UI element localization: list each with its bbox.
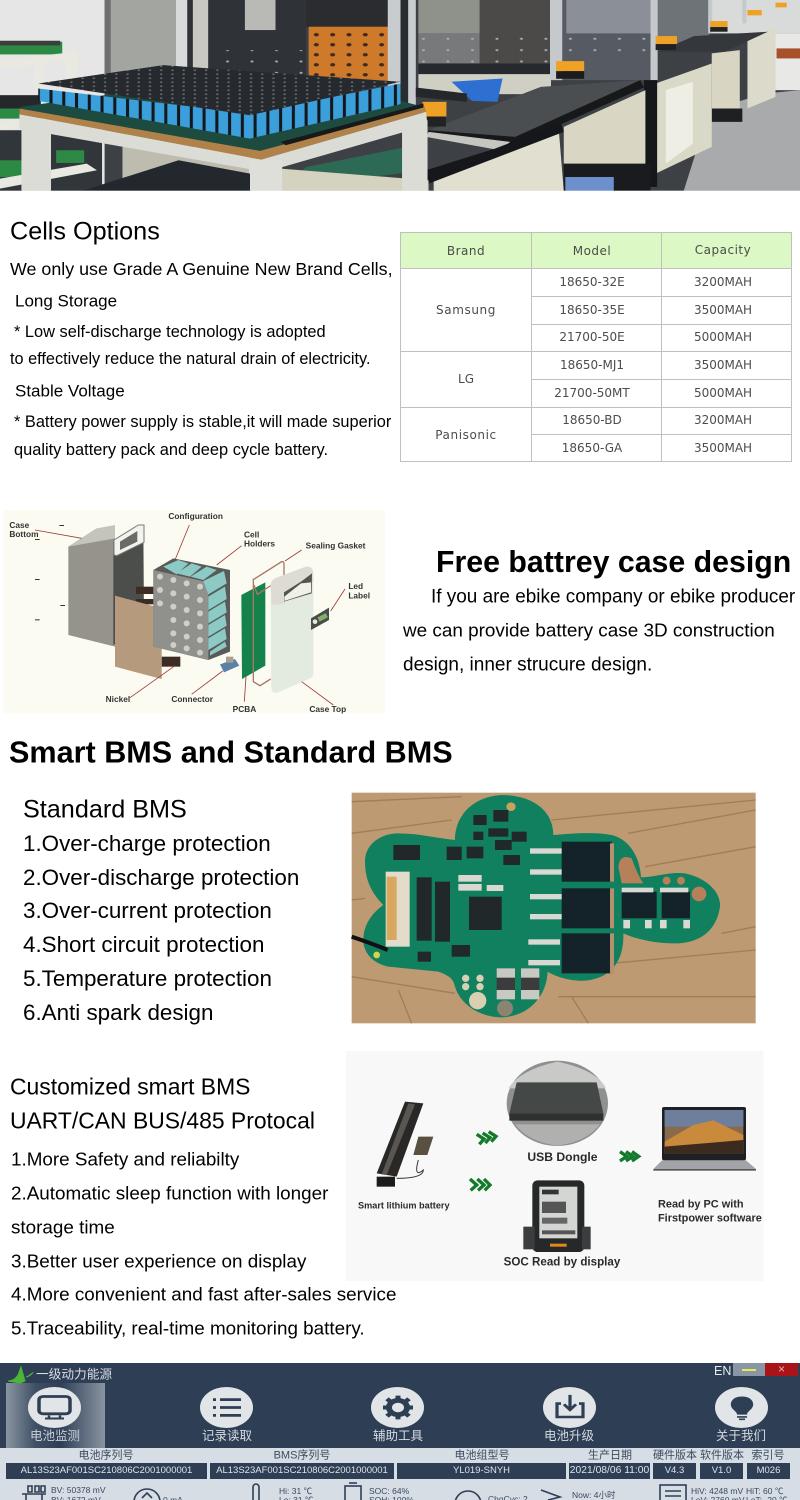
list: smart BMS benefits: storage time	[11, 1217, 115, 1238]
nav icon: about us	[715, 1387, 768, 1443]
diagram labels: Led	[348, 581, 363, 591]
battery info row: 电池序列号	[78, 1450, 134, 1462]
list: standard BMS protections: 5.Temperature protection	[23, 966, 272, 991]
window controls	[714, 1362, 798, 1378]
text block: cells description: to effectively reduce the natural drain of electricity.	[10, 350, 370, 368]
nav icon: record reading	[200, 1387, 253, 1443]
flow labels	[358, 1150, 762, 1269]
battery info row: M026	[757, 1465, 780, 1476]
flow labels: SOC Read by display	[504, 1256, 621, 1269]
text block: case design description: If you are ebike company or ebike producer	[431, 587, 795, 608]
sealing gasket	[253, 562, 284, 686]
workbench with cells	[20, 88, 423, 157]
nav icon: tools: 辅助工具	[373, 1429, 423, 1443]
nickel sheet	[115, 596, 162, 679]
battery info row: 软件版本	[700, 1450, 744, 1462]
diagram: exploded battery case	[4, 510, 385, 714]
list: smart BMS benefits	[11, 1149, 396, 1339]
list: smart BMS benefits: 3.Better user experience on display	[11, 1251, 306, 1272]
cell holders	[153, 558, 230, 660]
window controls: EN	[714, 1364, 731, 1378]
diagram labels: Cell	[244, 529, 259, 539]
list: standard BMS protections: 6.Anti spark design	[23, 1000, 213, 1025]
display	[523, 1180, 591, 1252]
battery info row: YL019-SNYH	[453, 1465, 510, 1476]
table: cell brands, models and capacity: 18650-GA	[562, 441, 622, 455]
heading: smart and standard BMS: Smart BMS and Standard BMS	[9, 736, 453, 770]
app logo and name: 一级动力能源	[36, 1368, 112, 1382]
list: smart BMS benefits: 2.Automatic sleep function with longer	[11, 1183, 328, 1204]
battery status row, clipped by the image edge: BV: 50378 mV	[51, 1485, 106, 1495]
battery	[377, 1102, 433, 1187]
diagram: smart BMS read flow	[358, 1060, 762, 1269]
battery status row, clipped by the image edge: HiT: 60 ℃	[746, 1486, 783, 1496]
list: standard BMS protections	[23, 831, 299, 1025]
table: cell brands, models and capacity: 5000MAH	[694, 330, 752, 344]
list: standard BMS protections: 3.Over-current protection	[23, 898, 272, 923]
battery status row, clipped by the image edge: SOC: 64%	[369, 1486, 409, 1496]
nav icon: about us: 关于我们	[716, 1429, 766, 1443]
list: standard BMS protections: 4.Short circuit protection	[23, 932, 264, 957]
list: smart BMS benefits: 5.Traceability, real-time monitoring battery.	[11, 1318, 365, 1339]
battery info row: 2021/08/06 11:00	[570, 1465, 649, 1476]
table: cell brands, models and capacity: 18650-35E	[559, 303, 625, 317]
text block: cells description	[10, 259, 393, 459]
battery info row: 索引号	[752, 1450, 784, 1462]
battery info row: BMS序列号	[274, 1450, 330, 1462]
table: cell brands, models and capacity: LG	[458, 372, 474, 386]
shelves at left	[0, 42, 62, 54]
diagram labels	[9, 511, 370, 714]
table: cell brands, models and capacity: 3200MAH	[694, 275, 752, 289]
text block: cells description: Stable Voltage	[15, 382, 125, 400]
text block: cells description: We only use Grade A Genuine New Brand Cells,	[10, 259, 393, 279]
nav icon: battery monitor	[28, 1387, 81, 1443]
battery info row	[6, 1449, 790, 1479]
table: cell brands, models and capacity: 3200MAH	[694, 413, 752, 427]
nav icon: battery upgrade	[543, 1387, 596, 1443]
battery status row, clipped by the image edge	[22, 1482, 788, 1500]
third station	[747, 27, 776, 109]
diagram labels: Case	[9, 520, 30, 530]
flow labels: Smart lithium battery	[358, 1200, 450, 1210]
table: cell brands, models and capacity: 5000MAH	[694, 386, 752, 400]
table: cell brands, models and capacity: 3500MAH	[694, 358, 752, 372]
window controls: ×	[778, 1362, 785, 1376]
diagram labels: Case Top	[309, 704, 346, 714]
flow labels: USB Dongle	[527, 1150, 598, 1164]
app logo and name	[8, 1366, 112, 1384]
text block: case design description: we can provide battery case 3D construction	[403, 621, 775, 642]
selected tab	[6, 1383, 105, 1448]
diagram labels: Nickel	[106, 694, 130, 704]
software screenshot panel	[0, 1363, 800, 1500]
diagram labels: PCBA	[233, 704, 256, 714]
table: cell brands, models and capacity: 3500MAH	[694, 303, 752, 317]
diagram labels: Holders	[244, 538, 275, 548]
table: cell brands, models and capacity: 21700-50MT	[554, 386, 630, 400]
connector	[220, 657, 239, 672]
table: cell brands, models and capacity	[400, 232, 792, 462]
flow labels: Firstpower software	[658, 1213, 762, 1225]
hero photo: battery production line	[0, 0, 800, 191]
diagram labels: Sealing Gasket	[306, 540, 366, 550]
heading: customized smart BMS: Customized smart BMS	[10, 1074, 250, 1100]
table: cell brands, models and capacity: Samsung	[436, 303, 496, 317]
diagram labels: Configuration	[168, 511, 223, 521]
battery info row: 电池组型号	[454, 1450, 510, 1462]
table: cell brands, models and capacity: 21700-50E	[559, 330, 625, 344]
text block: case design description: design, inner strucure design.	[403, 654, 652, 676]
case top	[271, 567, 313, 693]
LED label	[311, 608, 329, 630]
list: smart BMS benefits: 1.More Safety and reliabilty	[11, 1149, 239, 1170]
battery info row: AL13S23AF001SC210806C2001000001	[216, 1465, 388, 1476]
text block: cells description: Long Storage	[15, 292, 117, 310]
battery status row, clipped by the image edge: Now: 4小时	[572, 1490, 615, 1500]
table: cell brands, models and capacity: Brand	[447, 244, 485, 258]
table: cell brands, models and capacity: 18650-MJ1	[560, 358, 624, 372]
list: smart BMS benefits: 4.More convenient and fast after-sales service	[11, 1284, 396, 1305]
nav icon: battery upgrade: 电池升级	[544, 1429, 594, 1443]
USB dongle	[507, 1061, 608, 1146]
case bottom	[68, 525, 180, 667]
list: standard BMS protections: 1.Over-charge protection	[23, 831, 271, 856]
table: cell brands, models and capacity: 3500MAH	[694, 441, 752, 455]
field labels	[6, 1449, 790, 1479]
nav icon: battery monitor: 电池监测	[30, 1429, 80, 1443]
diagram labels: Label	[348, 590, 370, 600]
text block: cells description: * Battery power supply is stable,it will made superior	[14, 413, 391, 431]
nav icon: tools	[371, 1387, 424, 1443]
battery status row, clipped by the image edge: HiV: 4248 mV	[691, 1486, 743, 1496]
heading: free battery case design: Free battrey case design	[436, 546, 791, 579]
battery info row: V4.3	[665, 1465, 684, 1476]
diagram labels: Connector	[171, 694, 214, 704]
orange buttons and blue bin	[556, 61, 584, 71]
photo: BMS circuit board on wood	[351, 792, 756, 1024]
flow labels: Read by PC with	[658, 1199, 744, 1211]
battery info row: 硬件版本	[653, 1450, 697, 1462]
text block: cells description: quality battery pack and deep cycle battery.	[14, 441, 328, 459]
heading: cells options: Cells Options	[10, 217, 160, 245]
PCBA board	[241, 582, 265, 679]
battery info row: 生产日期	[588, 1450, 632, 1462]
text block: cells description: * Low self-discharge technology is adopted	[14, 323, 326, 341]
table: cell brands, models and capacity: Capacity	[695, 243, 751, 257]
table: cell brands, models and capacity: Panisonic	[435, 428, 497, 442]
list: standard BMS protections: 2.Over-discharge protection	[23, 865, 299, 890]
heading: standard BMS: Standard BMS	[23, 795, 187, 823]
table: cell brands, models and capacity: 18650-BD	[562, 413, 622, 427]
arrows	[470, 1132, 639, 1190]
dark header bar	[0, 1363, 800, 1448]
text block: case design description	[403, 587, 795, 676]
battery info row: V1.0	[712, 1465, 731, 1476]
nav icon: record reading: 记录读取	[202, 1429, 252, 1443]
diagram labels: Bottom	[9, 529, 38, 539]
callout lines	[35, 525, 345, 705]
table: cell brands, models and capacity: Model	[573, 244, 611, 258]
table: cell brands, models and capacity: 18650-32E	[559, 275, 625, 289]
battery info row: AL13S23AF001SC210806C2001000001	[21, 1465, 192, 1476]
laptop	[653, 1107, 756, 1171]
battery status row, clipped by the image edge: Hi: 31 ℃	[279, 1486, 312, 1496]
heading: protocol line: UART/CAN BUS/485 Protocal	[10, 1108, 315, 1134]
